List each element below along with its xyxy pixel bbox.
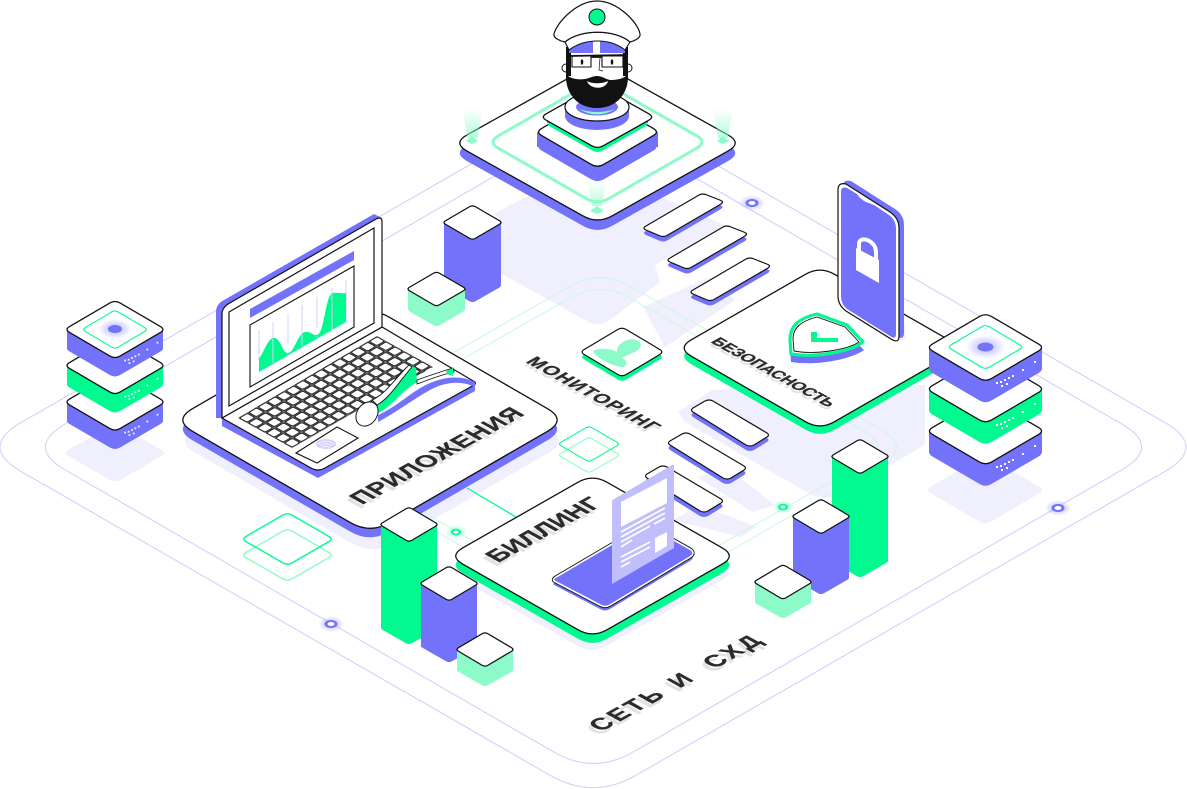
connector line: applications to billing: [467, 488, 516, 517]
monitoring stamp tile: [582, 328, 662, 381]
applications platform: [183, 312, 557, 537]
heading: СЕТЬ И СХД: СЕТЬ: [583, 684, 674, 735]
network node dots: [318, 195, 1071, 632]
light beams at platform corners: [463, 108, 733, 214]
server stack right: [929, 315, 1042, 486]
purple column left: [421, 567, 477, 662]
top platform: [460, 66, 735, 230]
heading: ПРИЛОЖЕНИЯ: ПРИЛОЖЕНИЯ: [344, 404, 531, 508]
trackpad with fingerprint: [296, 427, 358, 463]
purple column behind laptop: [444, 206, 501, 302]
server stack left: [67, 301, 163, 449]
icon: padlock: [856, 239, 879, 283]
heading: СЕТЬ И СХД: СЕТЬ: [581, 688, 672, 739]
heading: СЕТЬ И СХД: [581, 630, 771, 739]
billing phone lying flat: [554, 526, 693, 610]
heading: МОНИТОРИНГ: МОНИТОРИНГ: [522, 354, 666, 434]
heading: СЕТЬ И СХД: СХД: [694, 634, 769, 676]
laptop base: [222, 382, 475, 478]
outline diamonds: centre: [560, 427, 618, 472]
purple column right: [793, 500, 849, 594]
lower data bars: [646, 400, 768, 517]
chart on screen: [250, 266, 354, 387]
faint green network traces: [304, 278, 896, 616]
green column left: [381, 508, 437, 644]
invoice document: [612, 465, 674, 584]
phone shadow on platform: [836, 302, 905, 340]
heading: БИЛЛИНГ: БИЛЛИНГ: [478, 498, 607, 570]
icon: shield with check: [790, 314, 864, 363]
heading: БЕЗОПАСНОСТЬ: БЕЗОПАСНОСТЬ: [706, 339, 838, 412]
keyboard: [238, 336, 433, 448]
billing platform: [456, 478, 729, 643]
screen lid: [216, 214, 382, 418]
mint cube left: [457, 633, 513, 686]
lavender ground shadows: [66, 195, 1042, 650]
heading: МОНИТОРИНГ: МОНИТОРИНГ: [520, 357, 665, 437]
green column right: [832, 440, 888, 577]
heading: БИЛЛИНГ: БИЛЛИНГ: [480, 494, 609, 566]
laptop: [216, 214, 475, 478]
mint cube right: [755, 565, 811, 618]
heading: СЕТЬ И СХД: И: [661, 668, 703, 691]
mint ring on top platform: [493, 82, 702, 202]
mint cube behind laptop: [408, 272, 465, 326]
heading: БЕЗОПАСНОСТЬ: БЕЗОПАСНОСТЬ: [707, 336, 839, 409]
heading: СЕТЬ И СХД: И: [659, 672, 701, 695]
security platform: [684, 270, 956, 434]
security phone with lock: [838, 181, 904, 341]
upper data bars: [644, 194, 770, 306]
peeled green strip: [351, 365, 475, 430]
central stack on top platform: [537, 87, 658, 181]
character: bearded captain: [554, 1, 640, 108]
outline diamonds: left: [244, 514, 331, 580]
heading: ПРИЛОЖЕНИЯ: ПРИЛОЖЕНИЯ: [342, 408, 529, 512]
heading: СЕТЬ И СХД: СХД: [696, 630, 771, 672]
